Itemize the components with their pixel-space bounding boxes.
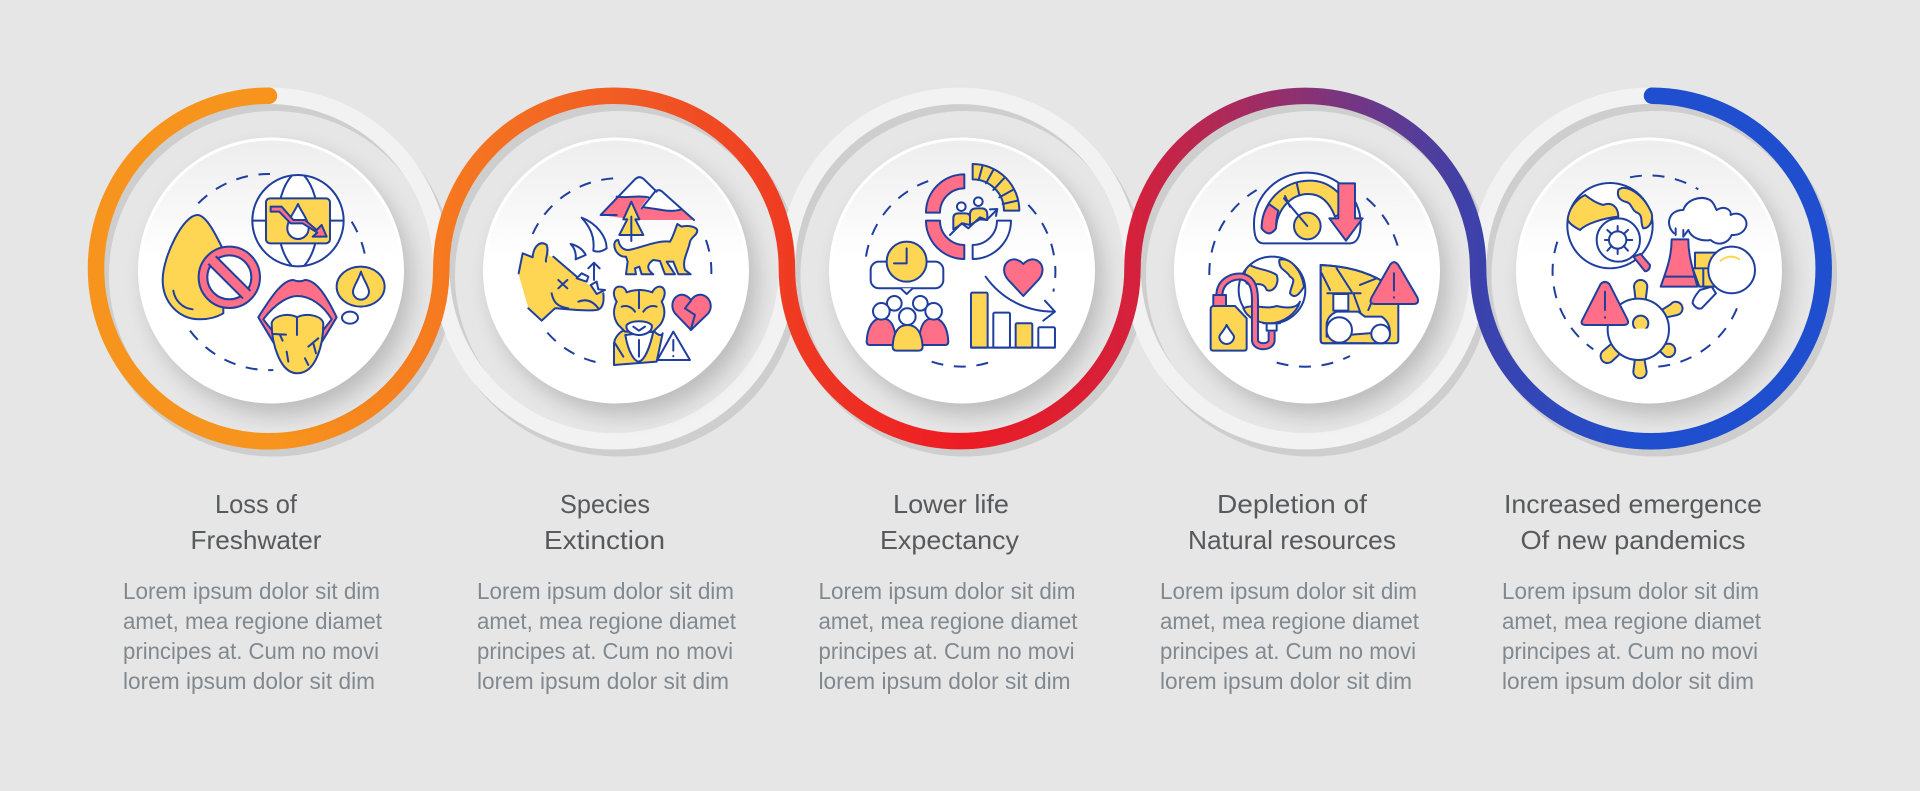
ghost track ring [268,96,1651,441]
icon: life expectancy [866,164,1055,367]
body text: amet, mea regione diamet [1160,608,1420,634]
text block: column 4 [1160,489,1420,694]
icon: freshwater [163,174,385,373]
icon: pandemics [1553,175,1755,378]
heading: depletion of natural resources: Natural resources [1188,525,1396,555]
body text: Lorem ipsum dolor sit dim [477,578,734,604]
heading: lower life expectancy: Expectancy [880,525,1019,555]
panel: depletion of natural resources [1176,139,1448,415]
icon: natural resources [1209,173,1418,367]
body text: Lorem ipsum dolor sit dim [818,578,1076,604]
heading: loss of freshwater: Loss of [215,489,298,519]
panel: species extinction [484,139,757,415]
body text: Lorem ipsum dolor sit dim [1502,578,1759,604]
body text: lorem ipsum dolor sit dim [477,668,729,694]
body text: lorem ipsum dolor sit dim [1160,668,1412,694]
body text: principes at. Cum no movi [1160,638,1416,664]
heading: increased emergence of new pandemics: Of new pandemics [1520,525,1746,555]
body text: amet, mea regione diamet [818,608,1078,634]
text block: column 2 [477,489,737,694]
body text [1160,578,1420,694]
body text: principes at. Cum no movi [818,638,1074,664]
body text [123,578,383,694]
heading: depletion of natural resources: Depletion of [1217,489,1368,519]
body text: amet, mea regione diamet [123,608,383,634]
body text: amet, mea regione diamet [1502,608,1762,634]
heading: lower life expectancy: Lower life [893,489,1009,519]
text block: column 1 [123,489,383,694]
heading: species extinction [544,489,665,555]
body text [1502,578,1762,694]
heading: increased emergence of new pandemics: Increased emergence [1504,489,1762,519]
body text: lorem ipsum dolor sit dim [1502,668,1754,694]
text block: column 3 [818,489,1078,694]
heading: increased emergence of new pandemics [1504,489,1762,555]
heading: loss of freshwater: Freshwater [190,525,322,555]
heading: lower life expectancy [880,489,1019,555]
panel: loss of freshwater [140,139,412,415]
heading: loss of freshwater [190,489,322,555]
body text: lorem ipsum dolor sit dim [818,668,1070,694]
heading: depletion of natural resources [1188,489,1396,555]
body text [477,578,737,694]
body text: principes at. Cum no movi [477,638,733,664]
icon: species [518,177,711,365]
panel: lower life expectancy [830,139,1103,415]
heading: species extinction: Species [560,489,650,519]
body text: Lorem ipsum dolor sit dim [123,578,380,604]
body text: principes at. Cum no movi [123,638,379,664]
gradient flowing ribbon [96,96,1824,441]
body text: amet, mea regione diamet [477,608,737,634]
ring shadows [101,103,1829,448]
body text [818,578,1078,694]
body text: lorem ipsum dolor sit dim [123,668,375,694]
heading: species extinction: Extinction [544,525,665,555]
body text: Lorem ipsum dolor sit dim [1160,578,1417,604]
panel: new pandemics [1518,139,1790,415]
text block: column 5 [1502,489,1762,694]
body text: principes at. Cum no movi [1502,638,1758,664]
